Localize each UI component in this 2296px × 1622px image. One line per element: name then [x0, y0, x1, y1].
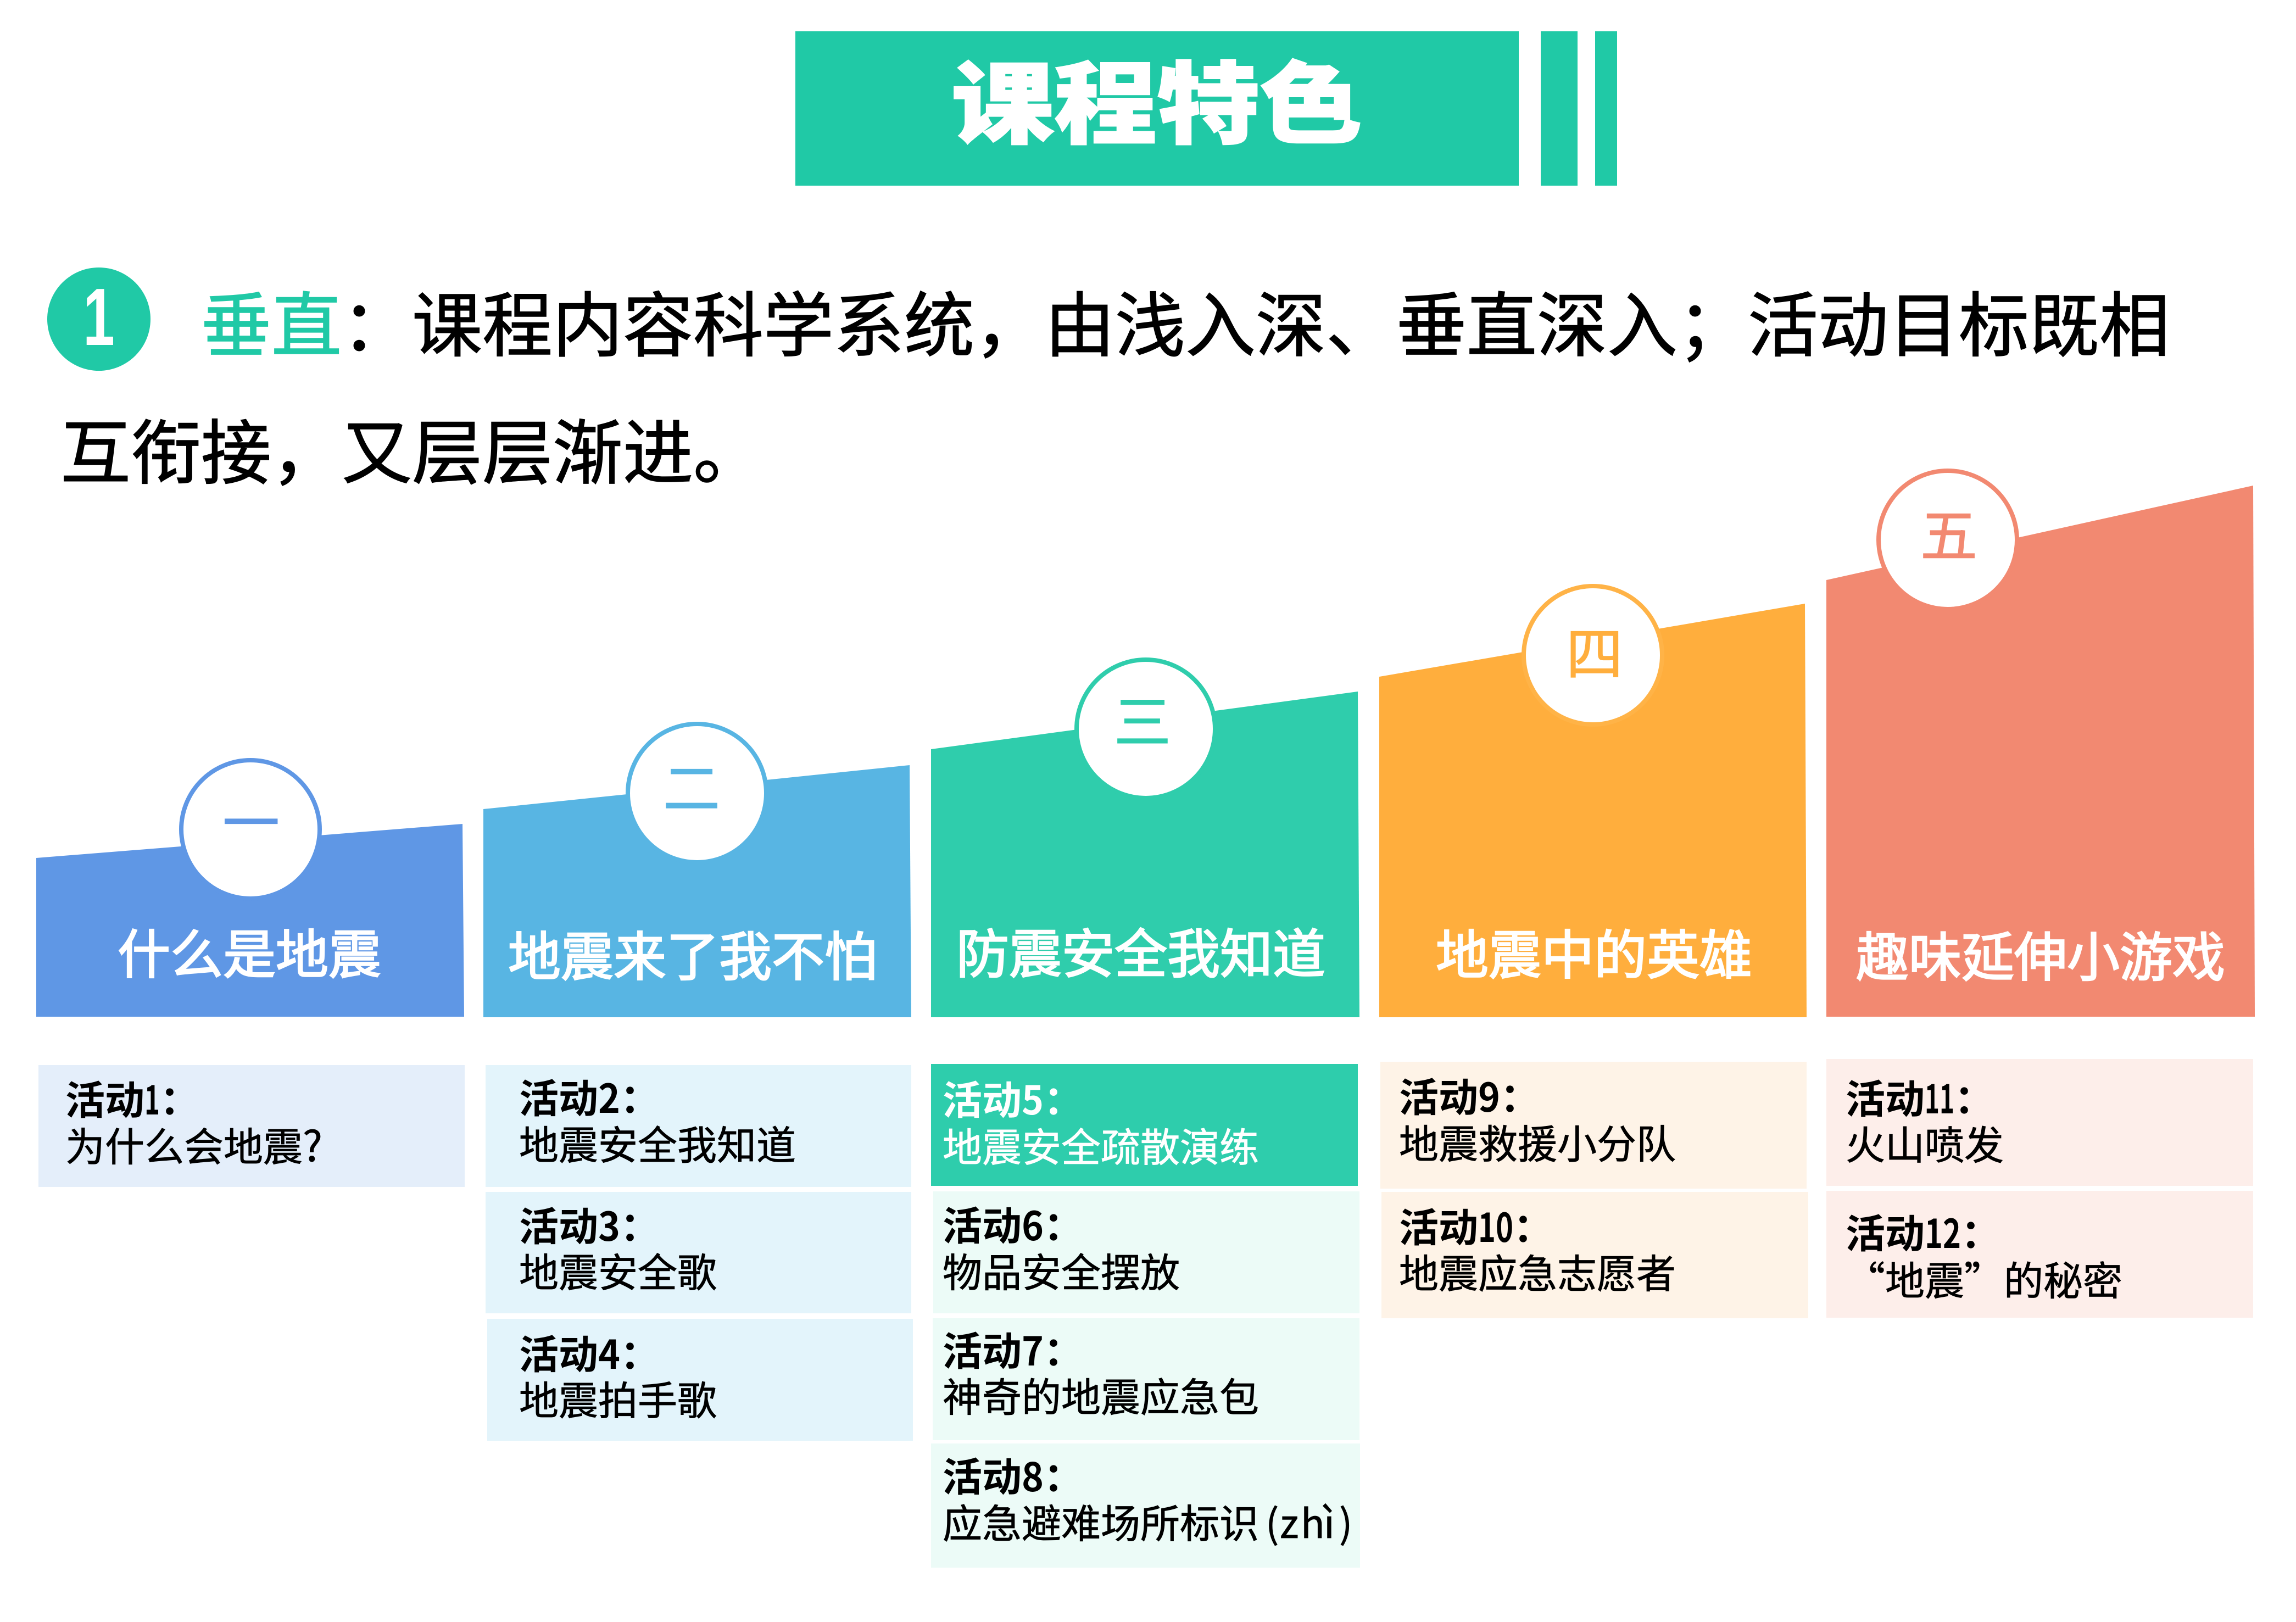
numbered badge: 1 — [47, 267, 151, 371]
panel: stage 1: 一 — [222, 777, 280, 860]
activity 2: 活动2： — [519, 1067, 660, 1124]
panel: stage 4: 地震中的英雄 — [1436, 913, 1752, 989]
intro text block: 垂直：课程内容科学系统，由浅入深、垂直深入；活动目标既相 — [201, 269, 2170, 371]
activity 5 (highlighted) — [931, 1064, 1358, 1186]
activity 2: 地震安全我知道 — [519, 1113, 796, 1171]
activity 8: z — [1280, 1492, 1299, 1549]
activity 8: 应急避难场所标识 — [943, 1492, 1259, 1549]
panel: stage 1 — [36, 760, 464, 1017]
activity 4 — [487, 1319, 913, 1441]
activity 2 — [486, 1065, 911, 1187]
activity 12: 活动12： — [1846, 1202, 2000, 1259]
activity 10: 活动10： — [1399, 1196, 1553, 1253]
activity 9 — [1380, 1062, 1807, 1189]
activity 3: 地震安全歌 — [519, 1241, 717, 1298]
activity 4: 地震拍手歌 — [519, 1369, 717, 1426]
activity 11: 火山喷发 — [1846, 1113, 2004, 1171]
numbered badge: 1: 1 — [83, 272, 115, 363]
activity 7 — [933, 1318, 1359, 1440]
activity 8: 活动8： — [943, 1445, 1083, 1503]
activity 8 — [931, 1443, 1360, 1568]
activity 1: 活动1： — [65, 1068, 199, 1126]
activity 8: ì — [1323, 1492, 1335, 1549]
panel: stage 4: 四 — [1566, 608, 1623, 691]
activity 6: 活动6： — [943, 1194, 1083, 1252]
panel: stage 5: 五 — [1920, 490, 1977, 573]
activity 1 — [38, 1065, 465, 1187]
activity 6: 物品安全摆放 — [943, 1241, 1180, 1298]
activity 5 (highlighted): 活动5： — [943, 1068, 1083, 1126]
activity 6 — [933, 1191, 1359, 1313]
activity 8: ) — [1339, 1492, 1352, 1549]
activity 4: 活动4： — [519, 1323, 660, 1380]
activity 1: 为什么会地震? — [65, 1113, 322, 1173]
activity 7: 神奇的地震应急包 — [943, 1365, 1259, 1423]
intro text block — [60, 269, 2170, 498]
panel: stage 3 — [931, 660, 1359, 1017]
activity 7: 活动7： — [943, 1319, 1083, 1377]
panel: stage 2: 二 — [663, 743, 720, 826]
activity 8: ( — [1266, 1492, 1279, 1549]
activity 12: “地震”的秘密 — [1846, 1249, 2122, 1307]
activity 9: 地震救援小分队 — [1399, 1112, 1676, 1170]
panel: stage 1: 什么是地震 — [118, 912, 381, 989]
activity 11: 活动11： — [1846, 1067, 1994, 1125]
activity 3: 活动3： — [519, 1195, 660, 1252]
intro text block: 互衔接，又层层渐进。 — [60, 397, 764, 498]
panel: stage 2: 地震来了我不怕 — [508, 915, 877, 991]
panel: stage 2 — [483, 724, 911, 1017]
title banner: 课程特色 — [951, 33, 1362, 162]
activity 9: 活动9： — [1399, 1066, 1540, 1123]
activity 10 — [1381, 1192, 1808, 1318]
activity 5 (highlighted): 地震安全疏散演练 — [943, 1116, 1259, 1173]
panel: stage 5 — [1826, 471, 2255, 1017]
title banner — [795, 31, 1617, 186]
activity 8: h — [1301, 1492, 1325, 1549]
panel: stage 5: 趣味延伸小游戏 — [1856, 915, 2225, 991]
activity 12 — [1826, 1191, 2253, 1318]
panel: stage 4 — [1379, 586, 1807, 1017]
activity 11 — [1826, 1059, 2253, 1186]
activity 10: 地震应急志愿者 — [1399, 1242, 1676, 1300]
panel: stage 3: 三 — [1114, 676, 1171, 759]
activity 3 — [486, 1192, 911, 1313]
panel: stage 3: 防震安全我知道 — [956, 912, 1325, 988]
